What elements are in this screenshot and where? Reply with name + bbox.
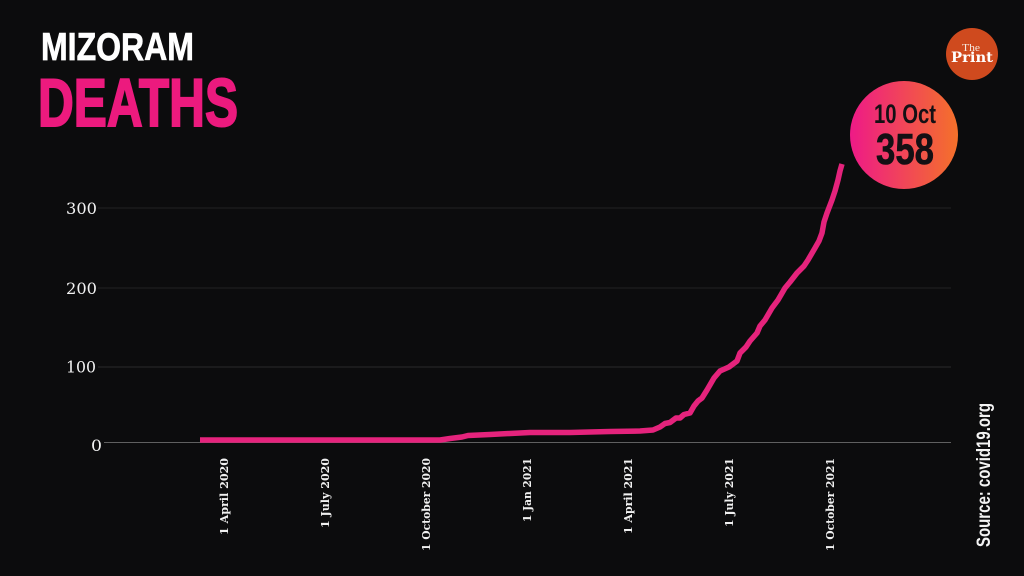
gridlines [98, 208, 951, 442]
title: Mizoram: MIZORAM [41, 26, 194, 69]
x-axis date labels: 1 October 2020 [420, 458, 433, 551]
icon: ThePrint logo [946, 28, 998, 80]
y-axis labels: 200 [66, 279, 97, 298]
x-axis date labels: 1 Jan 2021 [521, 458, 534, 522]
icon: ThePrint logo: The [962, 42, 980, 54]
x-axis date labels [218, 458, 837, 551]
x-axis date labels: 1 October 2021 [824, 458, 837, 551]
line chart: cumulative deaths [200, 164, 842, 440]
callout: 10 Oct 358: 358 [876, 125, 934, 174]
heading: Deaths: DEATHS [38, 65, 238, 141]
y-axis labels [66, 199, 102, 455]
callout: 10 Oct 358 [850, 81, 958, 189]
icon: ThePrint logo: Print [951, 50, 994, 66]
y-axis labels: 300 [66, 199, 97, 218]
y-axis labels: 0 [91, 436, 102, 455]
y-axis labels: 100 [66, 358, 96, 376]
x-axis date labels: 1 July 2021 [723, 458, 736, 527]
x-axis date labels: 1 April 2020 [218, 458, 231, 535]
source note: Source: covid19.org [974, 403, 995, 547]
x-axis date labels: 1 April 2021 [622, 458, 635, 534]
x-axis date labels: 1 July 2020 [319, 458, 332, 528]
callout: 10 Oct 358: 10 Oct [874, 99, 936, 129]
